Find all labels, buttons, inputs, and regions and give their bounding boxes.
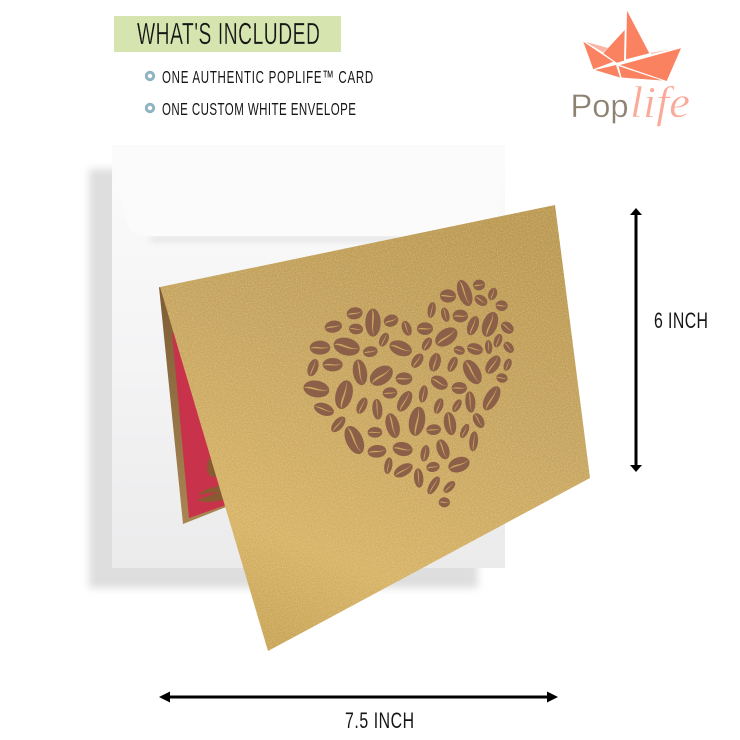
arrow: width dimension (159, 692, 558, 702)
coffee bean heart cutout (302, 278, 516, 508)
logo: Poplife origami boat (570, 11, 690, 127)
card front (160, 205, 590, 651)
envelope flap (112, 146, 505, 236)
envelope shadow (89, 169, 478, 588)
icon: paper boat (583, 11, 681, 81)
envelope flap shadow (150, 236, 400, 242)
label: 7.5 inch: 7.5 INCH (345, 710, 414, 734)
label: 6 inch: 6 INCH (654, 310, 708, 334)
card inside: red interior (159, 287, 240, 524)
envelope (112, 145, 505, 568)
heading: what's included: WHAT'S INCLUDED (137, 18, 320, 51)
list: included items (146, 68, 373, 120)
wordmark: Pop: Pop (570, 88, 628, 124)
list item: card: ONE AUTHENTIC POPLIFE™ CARD (162, 68, 373, 88)
wordmark: life: life (630, 78, 690, 127)
bean visible inside card (197, 483, 232, 502)
arrow: height dimension (630, 208, 642, 472)
list item: envelope: ONE CUSTOM WHITE ENVELOPE (162, 100, 356, 120)
